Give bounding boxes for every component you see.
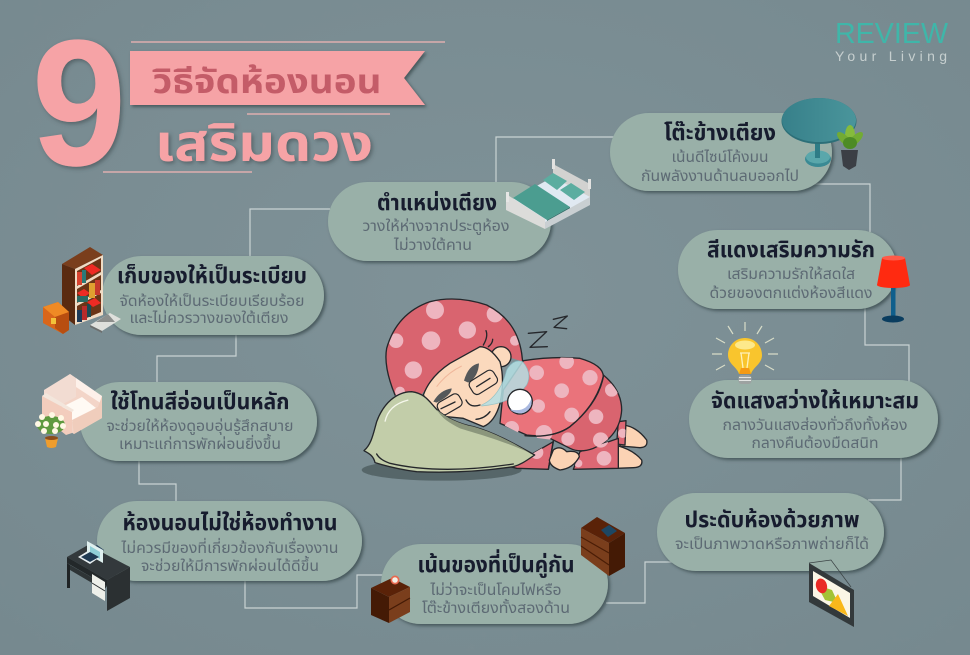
icon: tall dresser	[581, 517, 625, 576]
logo: Your Living	[835, 48, 947, 64]
panel: bed position	[328, 182, 551, 261]
logo: REVIEW	[835, 18, 949, 50]
title line one: วิธีจัดห้องนอน	[152, 63, 382, 101]
panel: soft colors: เหมาะแก่การพักผ่อนยิ่งขึ้น	[119, 433, 281, 453]
panel: decorate with pictures: จะเป็นภาพวาดหรือภาพถ่ายก็ได้	[675, 535, 869, 553]
panel: keep things tidy: จัดห้องให้เป็นระเบียบเรียบร้อย	[120, 293, 304, 310]
panel: red for love: ด้วยของตกแต่งห้องสีแดง	[710, 284, 872, 302]
panel: bed position: ตำแหน่งเตียง	[377, 190, 497, 215]
title line two: เสริมดวง	[155, 115, 373, 173]
panel: keep things tidy: และไม่ควรวางของใต้เตียง	[130, 309, 288, 327]
face	[423, 331, 511, 427]
title	[32, 3, 445, 204]
panel: matching pairs: เน้นของที่เป็นคู่กัน	[418, 549, 574, 578]
panel: lighting	[689, 380, 938, 458]
nightcap	[386, 299, 523, 397]
panel: keep things tidy	[102, 256, 324, 335]
shell collar	[482, 361, 529, 406]
panel: matching pairs	[381, 544, 608, 624]
panel: bedside table	[610, 113, 832, 191]
icon: armchair and flower pot	[35, 374, 102, 448]
panel: bedroom is not an office	[97, 501, 362, 581]
panel: lighting: จัดแสงสว่างให้เหมาะสม	[711, 388, 919, 413]
panel: bedside table: เน้นดีไซน์โค้งมน	[672, 149, 768, 166]
panel: lighting: กลางวันแสงส่องทั่วถึงทั้งห้อง	[722, 415, 908, 434]
icon: desk and laptop	[67, 541, 130, 611]
icon: nightstand and alarm clock	[371, 576, 410, 623]
panel: red for love: สีแดงเสริมความรัก	[707, 237, 875, 262]
panel: soft colors: ใช้โทนสีอ่อนเป็นหลัก	[110, 389, 290, 414]
panel: decorate with pictures: ประดับห้องด้วยภาพ	[684, 507, 860, 532]
panel: bedroom is not an office: ห้องนอนไม่ใช่ห้องทำงาน	[122, 510, 338, 535]
feet	[617, 425, 647, 468]
sleeping zzz	[528, 316, 567, 347]
icon: light bulb	[712, 322, 778, 384]
panel: bedside table: กันพลังงานด้านลบออกไป	[641, 168, 799, 185]
hand	[549, 448, 579, 470]
icon: red lamp	[877, 256, 910, 322]
panel: decorate with pictures	[657, 493, 884, 571]
panel: red for love	[678, 230, 897, 309]
connector lines between panels	[139, 137, 909, 608]
icon: round table and plant	[782, 98, 865, 170]
panel: bedroom is not an office: ไม่ควรมีของที่เกี่ยวข้องกับเรื่องงาน	[120, 537, 339, 557]
panel: red for love: เสริมความรักให้สดใส	[727, 266, 855, 283]
illustration: sleeping woman on a pillow	[362, 299, 647, 481]
panel: bedside table: โต๊ะข้างเตียง	[664, 120, 776, 145]
pompom	[508, 389, 532, 414]
icon: framed picture	[809, 560, 854, 627]
panel: bed position: วางให้ห่างจากประตูห้อง	[362, 217, 510, 235]
title ribbon	[130, 51, 425, 105]
panel: matching pairs: โต๊ะข้างเตียงทั้งสองด้าน	[422, 598, 570, 617]
panel: matching pairs: ไม่ว่าจะเป็นโคมไฟหรือ	[429, 581, 562, 599]
icon: bed	[506, 159, 591, 229]
icon: bookshelf, briefcase and book	[43, 247, 121, 334]
panel: lighting: กลางคืนต้องมืดสนิท	[752, 435, 878, 452]
panel: bedroom is not an office: จะช่วยให้มีการพักผ่อนได้ดีขึ้น	[141, 555, 319, 575]
panel: keep things tidy: เก็บของให้เป็นระเบียบ	[117, 263, 307, 288]
pajamas	[500, 354, 627, 469]
logo	[835, 18, 949, 64]
title number 9: 9	[32, 3, 126, 204]
panel: soft colors: จะช่วยให้ห้องดูอบอุ่นรู้สึกสบาย	[106, 417, 294, 435]
panel: bed position: ไม่วางใต้คาน	[393, 236, 472, 254]
pillow	[364, 392, 535, 472]
panel: soft colors	[80, 382, 317, 461]
